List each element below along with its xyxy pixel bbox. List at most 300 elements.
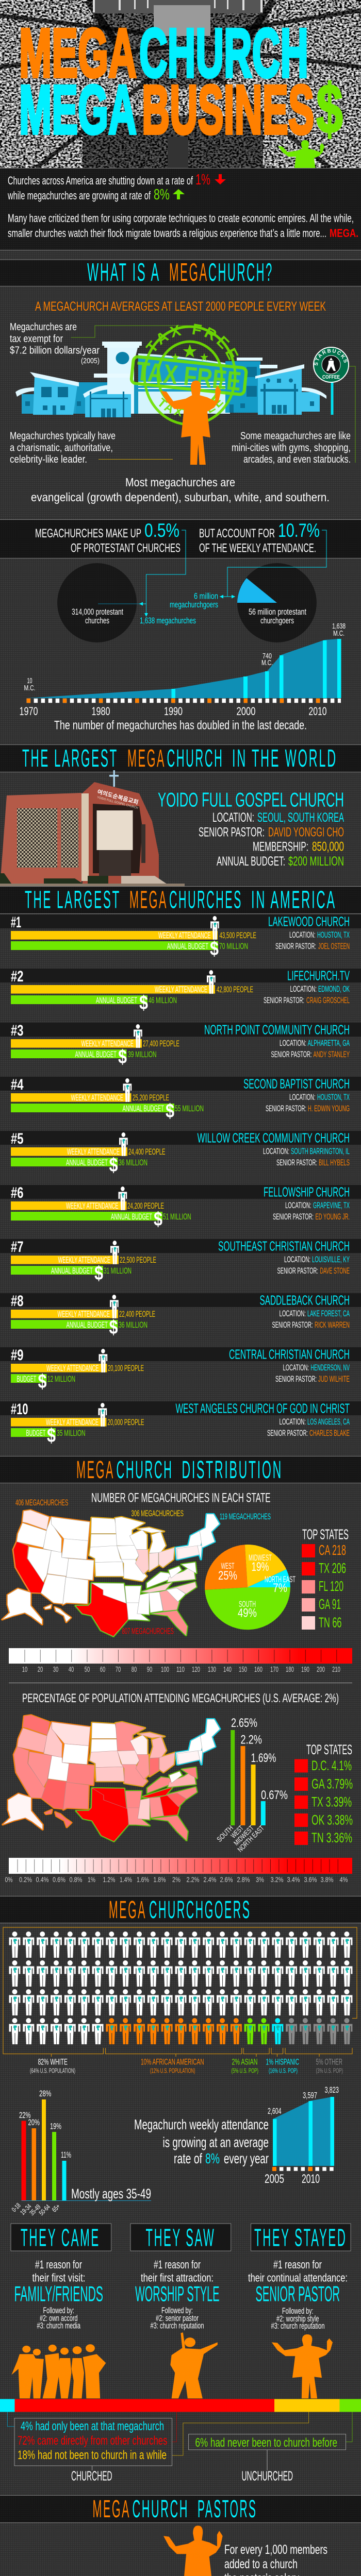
rank 2: LOCATION: bbox=[290, 985, 317, 994]
pictogram labels: ethnicity bbox=[30, 2057, 343, 2074]
panel: they saw: their first attraction: bbox=[141, 2271, 214, 2284]
legend: heat scale percentage: 1% bbox=[88, 1875, 95, 1884]
rank 6: $ bbox=[154, 1209, 162, 1230]
rank 5: LOCATION: bbox=[263, 1147, 289, 1156]
legend: heat scale counts: 190 bbox=[301, 1665, 309, 1674]
stat band: share of churches and attendance: 0.5% bbox=[144, 520, 179, 541]
panel: they saw: Followed by: bbox=[161, 2306, 193, 2315]
bar chart: regional percentage: MIDWEST bbox=[232, 1824, 255, 1847]
heading: megachurch distribution: MEGA bbox=[76, 1456, 114, 1484]
rank 7: LOCATION: bbox=[284, 1255, 310, 1264]
text: attendance growth: Megachurch weekly attendance bbox=[134, 2116, 269, 2132]
title: megachurch megabusiness bbox=[19, 15, 343, 148]
panel: they stayed: #3: church reputation bbox=[271, 2321, 325, 2331]
heading: megachurch distribution bbox=[76, 1456, 283, 1484]
pictogram labels: ethnicity: (16% U.S. POP) bbox=[269, 2067, 298, 2074]
rank 8 bbox=[0, 1293, 361, 1338]
pictogram labels: ethnicity: (64% U.S. POPULATION) bbox=[30, 2067, 75, 2074]
rank 7: ANNUAL BUDGET bbox=[51, 1266, 93, 1276]
area chart: number of megachurches: 740 bbox=[262, 652, 272, 660]
legend: heat scale counts: 170 bbox=[270, 1665, 278, 1674]
intro text block: Churches across America are shutting down at a rate of bbox=[8, 174, 193, 187]
rank 1: #1 bbox=[11, 914, 21, 931]
icon: orange pastor in front of stamp bbox=[161, 380, 221, 465]
rank 9 bbox=[0, 1347, 361, 1393]
rank 10: WEEKLY ATTENDANCE bbox=[46, 1418, 99, 1427]
heading: megachurch distribution: CHURCH bbox=[117, 1456, 173, 1484]
legend: heat scale percentage: 0.2% bbox=[19, 1875, 32, 1884]
pie chart: regional share: 49% bbox=[238, 1606, 257, 1620]
bar chart: ages: 20% bbox=[28, 2117, 40, 2127]
callout: tax exempt: $7.2 billion dollars/year bbox=[10, 345, 100, 357]
rank 1: ANNUAL BUDGET bbox=[167, 942, 208, 951]
legend: heat scale percentage: 3.2% bbox=[270, 1875, 284, 1884]
icon: group silhouette bbox=[11, 2344, 106, 2398]
rank 9: 12 MILLION bbox=[47, 1375, 75, 1384]
area chart: number of megachurches bbox=[20, 622, 346, 733]
map: megachurches per state bbox=[2, 1510, 219, 1636]
area chart: weekly attendance: 3,597 bbox=[303, 2091, 317, 2100]
legend: heat scale percentage: 2% bbox=[172, 1875, 180, 1884]
rank 8: SENIOR PASTOR: bbox=[272, 1320, 313, 1330]
rank 4: LOCATION: bbox=[289, 1093, 316, 1102]
title: megachurch megabusiness: MEGA bbox=[19, 15, 137, 92]
legend: heat scale counts: 120 bbox=[192, 1665, 200, 1674]
bar chart: regional percentage: SOUTH bbox=[215, 1824, 235, 1843]
legend: heat scale counts: 210 bbox=[332, 1665, 340, 1674]
legend: heat scale percentage: 3.6% bbox=[304, 1875, 317, 1884]
stamp: tax free: TAX FREE bbox=[159, 398, 224, 417]
legend: heat scale percentage: 2.2% bbox=[187, 1875, 199, 1884]
church building illustration bbox=[15, 342, 326, 417]
stat band: share of churches and attendance bbox=[35, 520, 320, 555]
area chart: weekly attendance bbox=[265, 2085, 339, 2186]
text: yoido church facts: SENIOR PASTOR: bbox=[199, 825, 265, 840]
map labels: 807 MEGACHURCHES bbox=[122, 1626, 174, 1636]
rank 4: 25,200 PEOPLE bbox=[133, 1093, 169, 1103]
panel: they stayed bbox=[248, 2224, 351, 2398]
photo: yoido church building: 여의도순복음교회 bbox=[96, 788, 139, 806]
icon: green pastor silhouette bbox=[278, 140, 324, 189]
pie: churchgoers: 56 million protestant bbox=[249, 607, 306, 617]
panel: they came: Followed by: bbox=[43, 2306, 74, 2315]
rank 4: #4 bbox=[11, 1076, 24, 1093]
heading: megachurch pastors: CHURCH bbox=[132, 2496, 189, 2523]
rank 2: $ bbox=[139, 992, 148, 1014]
pictogram labels: ethnicity: 10% AFRICAN AMERICAN bbox=[141, 2057, 204, 2067]
bar chart: regional percentage: 0.67% bbox=[261, 1788, 288, 1802]
rank 6: SENIOR PASTOR: bbox=[273, 1212, 314, 1222]
rank 10 bbox=[0, 1401, 361, 1447]
bar chart: regional percentage: 1.69% bbox=[251, 1751, 276, 1765]
bar chart: regional percentage: WEST bbox=[229, 1824, 245, 1840]
legend: heat scale percentage: 0% bbox=[5, 1875, 12, 1884]
text: yoido church facts: 850,000 bbox=[312, 840, 344, 854]
legend: heat scale percentage: 1.8% bbox=[154, 1875, 166, 1884]
rank 10: $ bbox=[47, 1425, 56, 1447]
rank 6: 24,200 PEOPLE bbox=[127, 1201, 164, 1211]
stamp: tax free bbox=[130, 324, 248, 426]
text: salary facts: added to a church bbox=[224, 2557, 298, 2571]
rank 10: BUDGET bbox=[26, 1429, 45, 1438]
rank 3: LOCATION: bbox=[280, 1039, 306, 1048]
icon: guitarist silhouette bbox=[170, 2332, 218, 2398]
rank 2: 42,800 PEOPLE bbox=[217, 985, 253, 994]
callout: leader: a charismatic, authoritative, bbox=[10, 442, 113, 453]
map labels: 306 MEGACHURCHES bbox=[131, 1509, 184, 1518]
rank 4: SENIOR PASTOR: bbox=[266, 1104, 306, 1113]
panel: they saw: #3: church reputation bbox=[151, 2321, 204, 2331]
rank 8: 22,400 PEOPLE bbox=[119, 1310, 155, 1319]
heading: megachurchgoers bbox=[109, 1896, 251, 1924]
rank 9: SENIOR PASTOR: bbox=[275, 1375, 317, 1384]
pie chart: regional share: WEST bbox=[221, 1561, 234, 1571]
intro text block: while megachurches are growing at rate of bbox=[7, 189, 151, 202]
bar chart: ages: 19% bbox=[50, 2122, 61, 2131]
rank 7: 22,500 PEOPLE bbox=[120, 1256, 156, 1265]
heading: largest megachurch in the world bbox=[22, 745, 337, 772]
heading: largest megachurches in america: CHURCHES bbox=[169, 886, 242, 914]
panel: they saw bbox=[130, 2224, 231, 2398]
legend: heat scale counts: 50 bbox=[85, 1665, 90, 1674]
rank 3: $ bbox=[118, 1046, 127, 1068]
area chart: number of megachurches: 1990 bbox=[164, 705, 183, 718]
callout: mini-cities bbox=[232, 431, 351, 465]
stamp: tax free: TAX FREE bbox=[135, 356, 242, 397]
legend: heat scale percentage bbox=[5, 1858, 352, 1884]
rank 10: SENIOR PASTOR: bbox=[267, 1429, 308, 1438]
legend: heat scale counts: 10 bbox=[22, 1665, 27, 1674]
rank 5: $ bbox=[109, 1155, 118, 1176]
icon: starbucks sign bbox=[313, 347, 349, 415]
area chart: weekly attendance: 3,823 bbox=[325, 2085, 339, 2095]
bar chart: ages: 11% bbox=[61, 2150, 71, 2160]
map labels bbox=[15, 1498, 271, 1636]
rank 3: #3 bbox=[11, 1022, 24, 1039]
callout: leader: celebrity-like leader. bbox=[10, 454, 87, 465]
rank 6: WEEKLY ATTENDANCE bbox=[66, 1201, 119, 1211]
pie: churchgoers: churchgoers bbox=[260, 616, 294, 625]
pie chart: regional share: 25% bbox=[218, 1569, 237, 1583]
rank 1: $ bbox=[210, 938, 219, 960]
rank 9: 20,100 PEOPLE bbox=[108, 1364, 144, 1373]
hero crowd photo bbox=[0, 0, 361, 168]
legend: heat scale counts: 140 bbox=[223, 1665, 232, 1674]
icon: green up arrow bbox=[173, 189, 185, 199]
area chart: number of megachurches: 1980 bbox=[92, 705, 110, 718]
legend: heat scale counts: 80 bbox=[132, 1665, 137, 1674]
heading: megachurch pastors: MEGA bbox=[93, 2496, 130, 2523]
rank 1: SENIOR PASTOR: bbox=[275, 942, 316, 951]
area chart: number of megachurches: 2000 bbox=[236, 705, 256, 718]
map: percentage per state bbox=[3, 1715, 220, 1841]
legend: top states by count bbox=[302, 1526, 349, 1630]
legend: heat scale percentage: 3.8% bbox=[321, 1875, 333, 1884]
rank 6: LOCATION: bbox=[285, 1201, 311, 1210]
title: megachurch megabusiness: MEGA bbox=[19, 72, 137, 148]
text: attendance growth: 8% bbox=[205, 2150, 220, 2166]
legend: heat scale counts: 60 bbox=[100, 1665, 105, 1674]
rank 5: SENIOR PASTOR: bbox=[276, 1158, 317, 1167]
rank 4: WEEKLY ATTENDANCE bbox=[71, 1093, 123, 1103]
pie: protestant churches bbox=[57, 563, 137, 642]
bar chart: ages: 50-64 bbox=[38, 2203, 52, 2217]
heading: largest megachurches in america: THE LARGEST bbox=[25, 886, 121, 914]
legend: heat scale percentage: 1.2% bbox=[103, 1875, 116, 1884]
legend: heat scale counts: 70 bbox=[116, 1665, 121, 1674]
area chart: number of megachurches: M.C. bbox=[24, 684, 35, 692]
heading: largest megachurch in the world: CHURCH bbox=[167, 745, 224, 772]
bar chart: ages bbox=[10, 2089, 151, 2217]
text: yoido church facts: ANNUAL BUDGET: bbox=[217, 854, 285, 869]
text: attendance growth: every year bbox=[224, 2150, 269, 2166]
legend: top states by count: TN 66 bbox=[319, 1615, 341, 1630]
rank 3: 39 MILLION bbox=[128, 1050, 157, 1059]
pie chart: regional share: SOUTH bbox=[239, 1599, 256, 1609]
text: yoido church facts bbox=[158, 789, 344, 869]
heading: megachurchgoers: MEGA bbox=[109, 1896, 146, 1924]
text: attendance growth: rate of bbox=[174, 2150, 202, 2166]
rank 1: 43,500 PEOPLE bbox=[220, 931, 256, 940]
rank 5 bbox=[0, 1130, 361, 1176]
pictogram labels: ethnicity: 82% WHITE bbox=[38, 2057, 68, 2067]
bar chart: ages: Mostly ages 35-49 bbox=[71, 2186, 151, 2201]
legend: heat scale percentage: 0.4% bbox=[36, 1875, 48, 1884]
rank 6 bbox=[0, 1184, 361, 1230]
rank 1: WEEKLY ATTENDANCE bbox=[158, 931, 210, 940]
rank 3: ANNUAL BUDGET bbox=[75, 1050, 117, 1059]
title: megachurch megabusiness: $ bbox=[316, 70, 343, 148]
panel: they came: #1 reason for bbox=[35, 2258, 82, 2271]
callout: leader: Megachurches typically have bbox=[10, 431, 116, 442]
pictogram: 100 churchgoers bbox=[3, 1927, 357, 2057]
text: most megachurches bbox=[31, 476, 330, 504]
text: yoido church facts: LOCATION: bbox=[212, 810, 254, 825]
heading: largest megachurches in america bbox=[25, 886, 336, 914]
panel: they stayed: #2: worship style bbox=[276, 2314, 319, 2324]
rank 3: 27,400 PEOPLE bbox=[143, 1039, 179, 1048]
intro text block: 1% bbox=[195, 172, 210, 188]
rank 7: 31 MILLION bbox=[104, 1266, 132, 1276]
bar chart: ages: 65+ bbox=[51, 2202, 61, 2214]
rank 3: SENIOR PASTOR: bbox=[271, 1050, 311, 1059]
area chart: number of megachurches: 1,638 bbox=[332, 622, 346, 631]
rank 4: $ bbox=[166, 1100, 174, 1122]
callout: unchurched: UNCHURCHED bbox=[241, 2468, 293, 2483]
text: salary facts bbox=[13, 2543, 327, 2576]
panel: they saw: #1 reason for bbox=[154, 2258, 201, 2271]
legend: heat scale counts: 40 bbox=[69, 1665, 74, 1674]
legend: heat scale percentage: 1.4% bbox=[120, 1875, 132, 1884]
stacked bar: church background bbox=[0, 2399, 361, 2470]
legend: heat scale counts: 200 bbox=[317, 1665, 325, 1674]
panel: they saw: #2: senior pastor bbox=[156, 2314, 199, 2323]
area chart: weekly attendance: 2010 bbox=[302, 2172, 320, 2186]
rank 9: LOCATION: bbox=[283, 1363, 309, 1372]
text: attendance growth bbox=[134, 2116, 269, 2166]
legend: heat scale percentage: 2.8% bbox=[237, 1875, 250, 1884]
panel: they came: their first visit: bbox=[32, 2271, 86, 2284]
rank 1 bbox=[0, 914, 361, 960]
rank 1: 70 MILLION bbox=[219, 942, 248, 951]
rank 5: WEEKLY ATTENDANCE bbox=[67, 1147, 120, 1157]
stat band: share of churches and attendance: OF PROTESTANT CHURCHES bbox=[71, 541, 180, 555]
bar chart: regional percentage bbox=[215, 1716, 288, 1854]
legend: heat scale counts: 180 bbox=[286, 1665, 294, 1674]
photo: yoido church building: YOIDO FULL GOSPEL CHURCH bbox=[96, 796, 138, 810]
rank 2: ANNUAL BUDGET bbox=[96, 996, 137, 1005]
rank 9: BUDGET bbox=[17, 1375, 36, 1384]
rank 8: WEEKLY ATTENDANCE bbox=[58, 1310, 110, 1319]
panel: they came: #3: church media bbox=[37, 2321, 81, 2331]
callout: leader bbox=[10, 431, 173, 465]
rank 4 bbox=[0, 1076, 361, 1122]
callout: churched: 4% had only been at that megachurch bbox=[21, 2419, 164, 2433]
intro text block bbox=[7, 172, 358, 240]
rank 5: ANNUAL BUDGET bbox=[66, 1158, 108, 1167]
legend: heat scale counts: 150 bbox=[239, 1665, 247, 1674]
icon: starbucks sign: STARBUCKS bbox=[314, 349, 348, 366]
rank 10: #10 bbox=[11, 1401, 28, 1418]
text: yoido church facts: MEMBERSHIP: bbox=[253, 840, 308, 854]
illustration: pastor on cash stacks bbox=[142, 2526, 223, 2576]
pie chart: regional share: MIDWEST bbox=[249, 1553, 272, 1563]
rank 2 bbox=[0, 968, 361, 1014]
area chart: number of megachurches: 1970 bbox=[20, 705, 38, 718]
rank 7: #7 bbox=[11, 1239, 24, 1256]
legend: top states by percentage bbox=[294, 1742, 353, 1845]
callout: tax exempt bbox=[10, 321, 100, 365]
callout: churched bbox=[14, 2418, 172, 2483]
rank 6: ANNUAL BUDGET bbox=[111, 1212, 152, 1222]
green connector tax bbox=[71, 326, 188, 337]
text: most megachurches: Most megachurches are bbox=[125, 476, 235, 489]
rank 8: 36 MILLION bbox=[119, 1320, 147, 1330]
map labels: 119 MEGACHURCHES bbox=[220, 1512, 271, 1521]
connectors and pie labels: 1,638 megachurches bbox=[140, 616, 196, 625]
rank 10: 20,000 PEOPLE bbox=[107, 1418, 144, 1427]
area chart: weekly attendance: 2,604 bbox=[268, 2106, 282, 2116]
rank 2: 46 MILLION bbox=[149, 996, 177, 1005]
legend: heat scale counts: 20 bbox=[38, 1665, 43, 1674]
pictogram labels: ethnicity: (5% U.S. POP) bbox=[231, 2067, 258, 2074]
callout: tax exempt: (2005) bbox=[81, 357, 100, 365]
map labels: 406 MEGACHURCHES bbox=[15, 1498, 68, 1507]
rank 8: ANNUAL BUDGET bbox=[66, 1320, 108, 1330]
callout: churched: 72% came directly from other churches bbox=[18, 2434, 167, 2448]
legend: heat scale counts: 100 bbox=[161, 1665, 169, 1674]
panel: they stayed: Followed by: bbox=[282, 2307, 314, 2316]
bar chart: ages: 35-49 bbox=[28, 2203, 42, 2217]
pictogram labels: ethnicity: (12% U.S. POPULATION) bbox=[150, 2067, 195, 2074]
panel: they came bbox=[11, 2224, 111, 2398]
panel: they came: FAMILY/FRIENDS bbox=[14, 2281, 103, 2306]
stat band: share of churches and attendance: BUT ACCOUNT FOR bbox=[199, 527, 275, 540]
text: attendance growth: is growing at an average bbox=[163, 2134, 269, 2150]
stat band: share of churches and attendance: MEGACHURCHES MAKE UP bbox=[35, 527, 141, 540]
callout: tax exempt: Megachurches are bbox=[10, 321, 77, 333]
panel: they saw: THEY SAW bbox=[145, 2225, 216, 2251]
rank 10: LOCATION: bbox=[280, 1417, 306, 1427]
pie: protestant churches: 314,000 protestant bbox=[72, 607, 123, 617]
rank 5: 36 MILLION bbox=[119, 1158, 147, 1167]
callout: churched: CHURCHED bbox=[71, 2468, 112, 2483]
photo: yoido church building bbox=[0, 770, 185, 886]
legend: heat scale percentage: 0.6% bbox=[53, 1875, 65, 1884]
heading: largest megachurch in the world: THE LARGEST bbox=[22, 745, 118, 772]
connectors and pie labels: megachurchgoers bbox=[170, 600, 218, 609]
icon: starbucks sign: COFFEE bbox=[322, 375, 340, 380]
callout: tax exempt: tax exempt for bbox=[10, 333, 63, 345]
legend: heat scale percentage: 1.6% bbox=[137, 1875, 149, 1884]
stamp: tax free: TAX FREE bbox=[145, 324, 238, 361]
pictogram labels: ethnicity: 2% ASIAN bbox=[232, 2057, 258, 2067]
legend: heat scale percentage: 0.8% bbox=[69, 1875, 83, 1884]
rank 3: WEEKLY ATTENDANCE bbox=[81, 1039, 134, 1048]
rank 8: $ bbox=[109, 1317, 118, 1338]
bar chart: ages: 19-34 bbox=[19, 2202, 33, 2216]
rank 9: #9 bbox=[11, 1347, 24, 1364]
panel: they came: #2: own accord bbox=[40, 2314, 77, 2323]
icon: red down arrow bbox=[215, 174, 226, 184]
rank 8: #8 bbox=[11, 1293, 24, 1310]
pie: protestant churches: churches bbox=[85, 616, 109, 625]
area chart: number of megachurches: M.C. bbox=[333, 629, 344, 638]
heading: largest megachurch in the world: MEGA bbox=[127, 745, 166, 772]
legend: heat scale counts: 130 bbox=[208, 1665, 216, 1674]
icon: pastor silhouette bbox=[272, 2334, 333, 2398]
area chart: number of megachurches: 2010 bbox=[308, 705, 327, 718]
rank 4: 55 MILLION bbox=[175, 1104, 204, 1113]
rank 6: 51 MILLION bbox=[163, 1212, 191, 1222]
bar chart: regional percentage: NORTH EAST bbox=[236, 1824, 266, 1854]
rank 7: WEEKLY ATTENDANCE bbox=[58, 1256, 110, 1265]
infographic canvas: CHURCH? bbox=[208, 259, 273, 286]
rank 9: WEEKLY ATTENDANCE bbox=[46, 1364, 99, 1373]
connectors and pie labels: 6 million bbox=[194, 591, 218, 601]
legend: heat scale percentage: 2.6% bbox=[220, 1875, 233, 1884]
pie chart: regional share: 7% bbox=[273, 1581, 287, 1595]
rank 2: #2 bbox=[11, 968, 24, 985]
rank 5: 24,400 PEOPLE bbox=[128, 1147, 165, 1157]
rank 7: $ bbox=[94, 1263, 103, 1284]
rank 6: #6 bbox=[11, 1184, 24, 1201]
area chart: number of megachurches: M.C. bbox=[261, 658, 273, 667]
bar chart: regional percentage: 2.2% bbox=[240, 1733, 262, 1747]
rank 9: $ bbox=[38, 1371, 46, 1393]
pictogram labels: ethnicity: 5% OTHER bbox=[316, 2057, 342, 2067]
rank 5: #5 bbox=[11, 1130, 24, 1147]
pie chart: regional share: NORTH EAST bbox=[265, 1574, 296, 1584]
legend: heat scale counts: 90 bbox=[147, 1665, 152, 1674]
stat band: share of churches and attendance: 10.7% bbox=[278, 520, 320, 541]
pictogram labels: ethnicity: 1% HISPANIC bbox=[266, 2057, 299, 2067]
callout: unchurched bbox=[189, 2434, 346, 2483]
pie chart: regional share: 19% bbox=[252, 1560, 269, 1574]
rank 8: LOCATION: bbox=[280, 1309, 306, 1318]
rank 3 bbox=[0, 1022, 361, 1068]
legend: heat scale counts: 30 bbox=[53, 1665, 58, 1674]
area chart: weekly attendance: 2005 bbox=[265, 2172, 284, 2186]
rank 7: SENIOR PASTOR: bbox=[277, 1266, 318, 1276]
rank 7 bbox=[0, 1239, 361, 1284]
callout: churched: 18% had not been to church in a while bbox=[18, 2448, 167, 2462]
text: most megachurches: evangelical (growth dependent), suburban, white, and southern. bbox=[31, 490, 330, 504]
panel: they saw: WORSHIP STYLE bbox=[135, 2281, 220, 2306]
legend: heat scale percentage: 2.4% bbox=[203, 1875, 217, 1884]
bar chart: regional percentage: 2.65% bbox=[231, 1716, 257, 1730]
infographic canvas: PASTORS bbox=[198, 2496, 257, 2523]
